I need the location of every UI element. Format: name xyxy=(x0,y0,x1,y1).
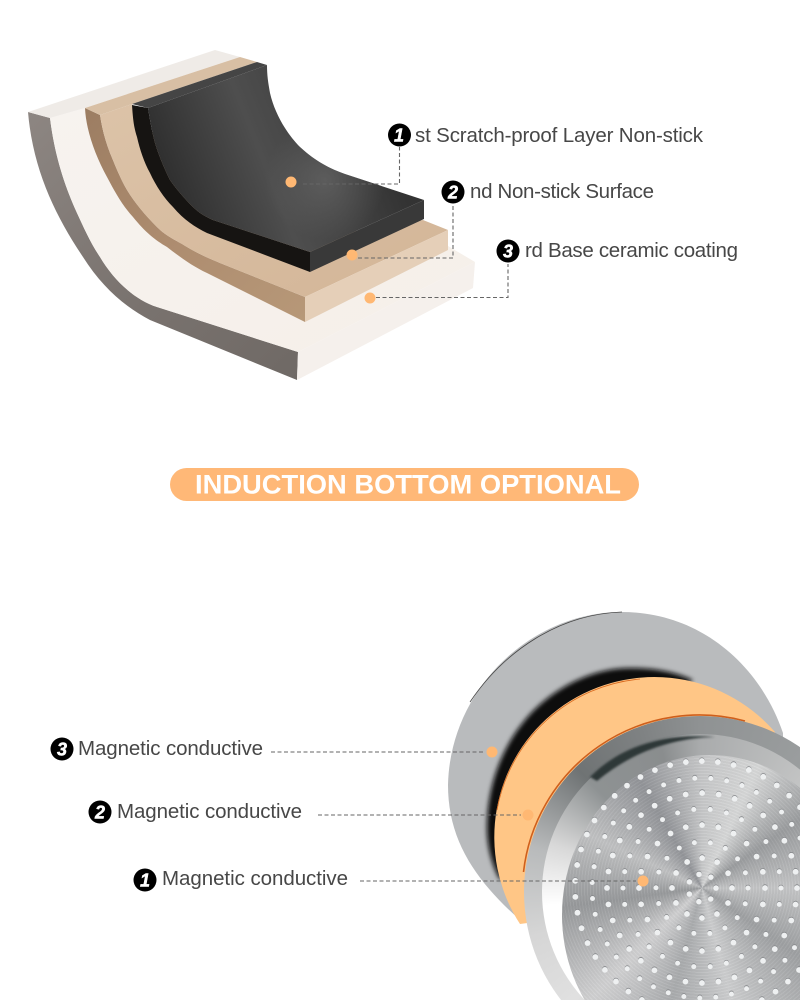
callout: magnetic conductive 1: Magnetic conductive xyxy=(162,867,348,890)
white base layer xyxy=(28,50,475,380)
callout: magnetic conductive 3: 3 xyxy=(57,740,67,760)
steel pan base xyxy=(524,716,800,1000)
callout 2: non-stick surface: nd Non-stick Surface xyxy=(470,180,654,203)
callout: magnetic conductive 3: Magnetic conductive xyxy=(78,737,263,760)
callout 2: non-stick surface: 2 xyxy=(447,182,458,202)
callout: magnetic conductive 2: Magnetic conductive xyxy=(117,800,302,823)
callout 1: scratch-proof layer: 1 xyxy=(394,126,404,146)
dark crescent inside rim xyxy=(590,736,715,781)
callout 1: scratch-proof layer xyxy=(286,124,704,188)
perforation dot rings xyxy=(575,760,800,1000)
grey magnetic disc xyxy=(448,612,783,920)
callout: magnetic conductive 1 xyxy=(134,867,648,892)
callout: magnetic conductive 1: 1 xyxy=(140,870,150,890)
tan middle layer xyxy=(85,57,448,322)
callout: magnetic conductive 2 xyxy=(88,800,534,824)
heading pill: induction bottom optional: INDUCTION BOTTOM OPTIONAL xyxy=(195,470,621,500)
black top layer xyxy=(132,62,424,272)
orange conductive disc xyxy=(494,677,775,924)
exploded induction base illustration xyxy=(448,612,800,1000)
callout 2: non-stick surface xyxy=(346,180,654,260)
callout: magnetic conductive 2: 2 xyxy=(94,802,105,822)
layered coating illustration xyxy=(28,50,475,380)
callout 3: base ceramic coating: 3 xyxy=(503,242,513,262)
callout: magnetic conductive 3 xyxy=(50,737,498,760)
callout 1: scratch-proof layer: st Scratch-proof Layer Non-stick xyxy=(415,124,704,147)
callout 3: base ceramic coating: rd Base ceramic coating xyxy=(525,239,738,262)
callout 3: base ceramic coating xyxy=(364,239,738,304)
